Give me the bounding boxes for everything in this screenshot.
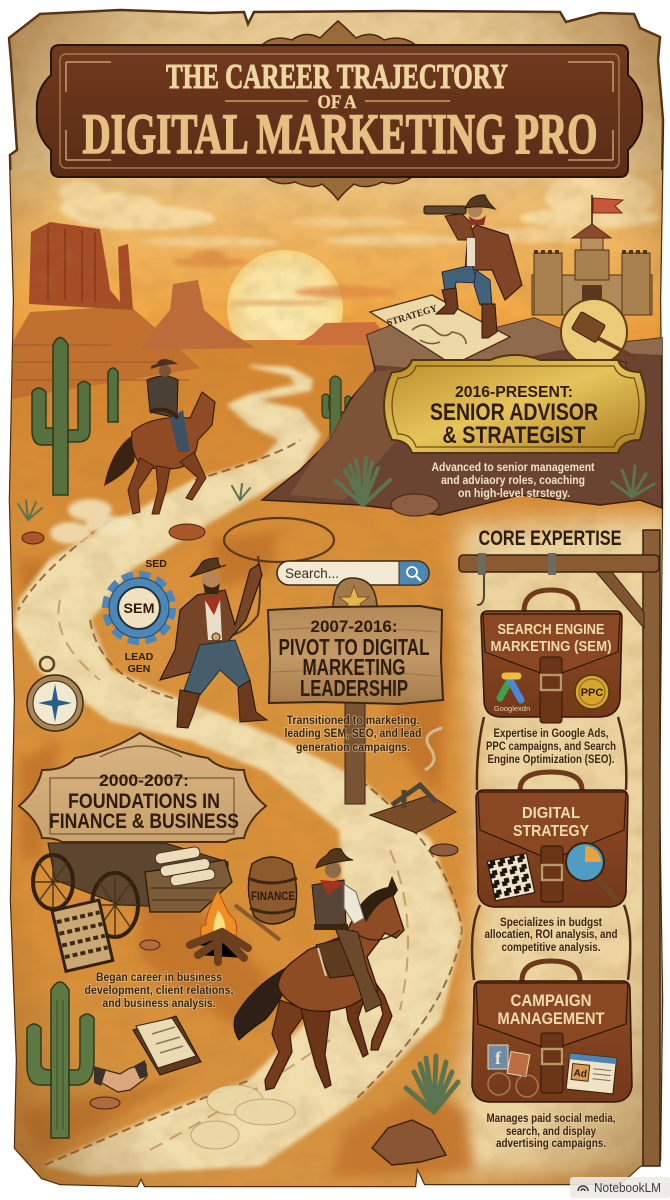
tail <box>234 963 295 1040</box>
vest <box>312 880 346 926</box>
icon: telegraph <box>370 728 456 833</box>
description: campaign management: advertising campaigns. <box>496 1138 606 1150</box>
plaque body <box>37 45 642 177</box>
icon: strategy map: STRATEGY <box>386 303 439 329</box>
rider on horse: foreground <box>234 849 404 1090</box>
heading: SEARCH ENGINE <box>498 622 605 638</box>
far ridge <box>296 322 381 345</box>
description: digital strategy: Specializes in budgst <box>500 917 602 929</box>
cactus: upper left <box>32 338 118 495</box>
description: 2000-2007: and business analysis. <box>102 998 216 1010</box>
signpost post <box>345 700 365 804</box>
signboard: 2007-2016: MARKETING <box>302 654 406 680</box>
clouds <box>58 172 660 247</box>
panel: SEM bag <box>481 590 622 723</box>
icon: castle <box>532 195 652 315</box>
description: 2007-2016: leading SEM, SEO, and lead <box>284 728 422 740</box>
orange bank bottom <box>330 1090 475 1178</box>
title plaque <box>37 21 642 200</box>
description: digital strategy: competitive analysis. <box>502 942 600 954</box>
watermark: NotebookLM <box>594 1181 661 1195</box>
belt <box>314 924 348 930</box>
ornament: top <box>260 21 418 47</box>
description: 2016-present: Advanced to senior management <box>432 462 595 474</box>
icon: PPC coin: PPC <box>581 687 603 699</box>
rein <box>352 930 400 940</box>
heading: CAMPAIGN <box>510 992 592 1010</box>
saddle <box>316 938 356 978</box>
strap <box>540 657 562 723</box>
rider leg <box>335 928 382 1012</box>
signboard: 2007-2016 <box>268 578 443 704</box>
icon: strategy map <box>370 295 510 365</box>
description: SEM: PPC campaigns, and Search <box>486 741 616 753</box>
icon: compass <box>27 657 83 731</box>
heading: 2007-2016: <box>310 617 398 636</box>
sun <box>227 250 343 340</box>
signboard: 2007-2016: PIVOT TO DIGITAL <box>278 634 430 660</box>
icon: magnifier chart <box>566 843 618 902</box>
heading: 2000-2007: <box>99 772 189 790</box>
panel: campaign management bag <box>472 961 632 1102</box>
icon: finance barrel <box>248 857 297 924</box>
title text: THE CAREER TRAJECTORY <box>166 57 508 96</box>
label: lead gen <box>125 651 154 675</box>
heading: 2016-PRESENT: <box>455 384 573 401</box>
label: lead gen: LEAD <box>125 651 154 663</box>
plaque: 2000-2007: FINANCE & BUSINESS <box>49 809 239 833</box>
flag <box>591 195 593 224</box>
plaque: 2016-present: SENIOR ADVISOR <box>430 399 598 426</box>
icon: abacus <box>52 900 113 971</box>
description: SEM: Engine Optimization (SEO). <box>488 754 614 766</box>
description: 2016-present: on high-level strstegy. <box>458 488 570 500</box>
icon: chessboard <box>487 853 535 901</box>
agave and rocks: below cliff <box>18 458 654 544</box>
label: google: Googlexdn <box>494 704 530 713</box>
icon: finance barrel: FINANCE <box>251 891 295 903</box>
description: campaign management: Manages paid social media, <box>486 1113 616 1125</box>
icon: ad window: Ad <box>573 1068 587 1080</box>
icon: SEM gear: SEM <box>124 600 154 616</box>
expertise backdrop <box>450 515 670 1175</box>
cliff <box>262 318 662 515</box>
icon: lasso <box>215 518 334 637</box>
mesa: left <box>5 222 200 400</box>
horse body <box>278 890 404 1011</box>
rider on horse: distant <box>104 359 215 514</box>
description: 2007-2016 <box>284 715 422 754</box>
dust cloud: upper <box>50 499 135 544</box>
plaque: 2000-2007: FOUNDATIONS IN <box>68 789 220 813</box>
shirt sleeve <box>344 884 364 924</box>
icon: campfire <box>190 890 280 962</box>
signboard: 2007-2016: LEADERSHIP <box>300 675 408 701</box>
figure: cowboy with lasso <box>160 558 267 728</box>
icon: social stamps: f <box>495 1048 502 1068</box>
cactus: right of trail <box>322 376 351 440</box>
plaque: 2016-present <box>384 355 646 453</box>
panel: digital strategy bag <box>476 772 628 907</box>
divider <box>225 100 450 102</box>
title plaque: OF A <box>318 92 357 113</box>
hanging post <box>459 530 660 1166</box>
description: 2016-present <box>432 462 595 500</box>
icon: social stamps <box>488 1045 538 1097</box>
hind legs <box>265 1000 308 1090</box>
description: digital strategy <box>484 917 618 954</box>
description: SEM: Expertise in Google Ads, <box>494 728 608 740</box>
figure: cowboy with spyglass <box>424 195 522 338</box>
plaque: 2000-2007 <box>19 733 266 842</box>
icon: covered wagon <box>33 843 232 937</box>
description: campaign management <box>486 1113 616 1150</box>
icon: gavel <box>561 299 636 369</box>
panel: digital strategy bag: STRATEGY <box>513 823 590 840</box>
icon: ad window <box>566 1053 617 1094</box>
label: SED: SED <box>145 558 167 570</box>
search bar: Search... <box>285 565 339 581</box>
icon: google ads <box>500 676 521 700</box>
description: 2000-2007: Began career in business <box>96 972 222 984</box>
mesa: centre <box>140 280 255 350</box>
ears and mane <box>358 876 398 922</box>
panel: SEM bag: MARKETING (SEM) <box>490 639 612 655</box>
description: digital strategy: allocatien, ROI analysis, and <box>484 929 618 941</box>
icon: handshake <box>94 1060 148 1092</box>
agave: lower right <box>406 1056 458 1112</box>
cactus: lower left <box>27 982 94 1138</box>
description: SEM <box>486 728 616 766</box>
plaque: 2016-present: & STRATEGIST <box>442 422 586 449</box>
dust cloud: lower <box>191 1085 295 1149</box>
icon: PPC coin <box>575 675 609 709</box>
label: lead gen: GEN <box>128 663 150 675</box>
watermark <box>570 1177 670 1198</box>
heading: DIGITAL <box>522 805 580 822</box>
heading: core expertise: CORE EXPERTISE <box>478 527 622 550</box>
description: 2007-2016: Transitioned to marketing. <box>286 715 420 727</box>
icon: ledger book <box>133 1016 201 1075</box>
description: campaign management: search, and display <box>506 1126 597 1138</box>
sky <box>0 170 670 360</box>
front legs <box>345 1000 368 1057</box>
description: 2016-present: and adviaory roles, coaching <box>441 475 585 487</box>
icon: SEM gear <box>109 578 169 638</box>
ornament: bottom <box>260 172 418 200</box>
icon: scrolls <box>154 846 216 887</box>
rock: lower right <box>90 844 458 1165</box>
description: 2000-2007 <box>84 972 234 1010</box>
search bar <box>277 561 429 585</box>
trail <box>15 366 462 1175</box>
dark ground patches <box>18 530 450 1155</box>
panel: campaign management bag: MANAGEMENT <box>498 1010 604 1028</box>
description: 2000-2007: development, client relations, <box>84 985 234 997</box>
ground <box>0 340 670 1200</box>
description: 2007-2016: generation campaigns. <box>296 742 410 754</box>
low clouds <box>172 250 395 305</box>
straps between bags <box>472 717 630 980</box>
